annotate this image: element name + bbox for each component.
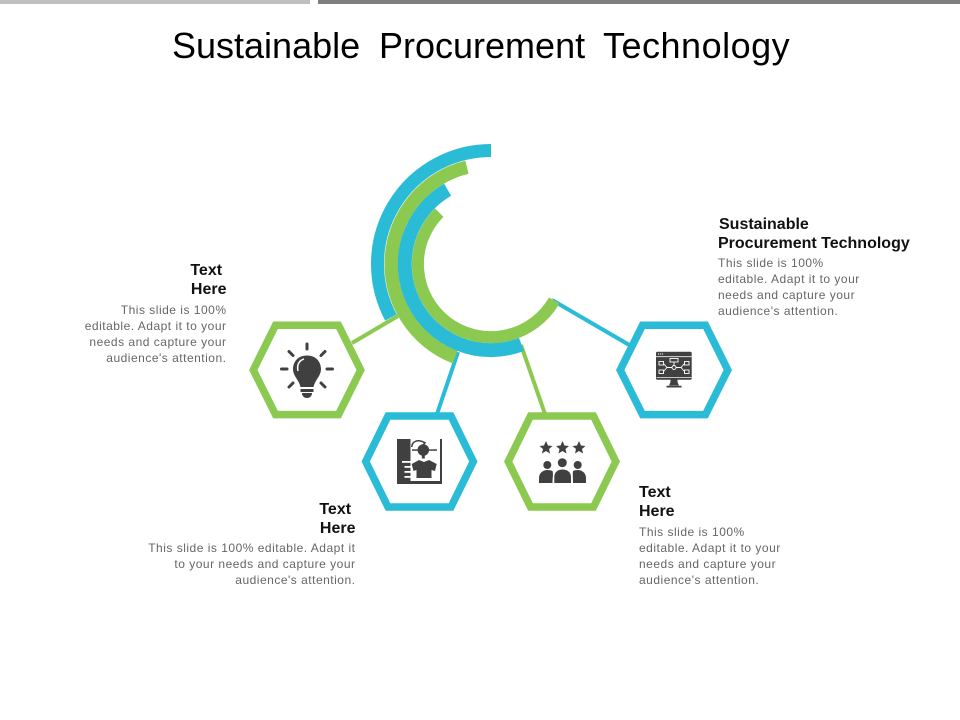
body: monitor: editable. Adapt it to your: [718, 272, 860, 286]
title: Sustainable: [172, 25, 360, 66]
body: people: editable. Adapt it to your: [639, 541, 781, 555]
heading: shirt: [319, 501, 356, 537]
text block: people: [639, 484, 781, 587]
heading: people: [639, 484, 675, 520]
arc: second green: [391, 167, 467, 357]
icon: light bulb: [282, 344, 332, 398]
concentric arcs: [377, 150, 554, 357]
body: shirt: This slide is 100% editable. Adapt it: [148, 541, 356, 555]
hexagon: bulb: [253, 325, 361, 415]
text block: monitor: [718, 216, 910, 318]
body: shirt: [148, 541, 356, 587]
heading: bulb: [190, 262, 226, 298]
body: bulb: needs and capture your: [89, 335, 226, 349]
body: people: audience's attention.: [639, 573, 759, 587]
heading: bulb: Text: [190, 262, 222, 279]
hexagon: people: [508, 416, 616, 507]
icon: people and stars: [539, 441, 586, 483]
body: bulb: editable. Adapt it to your: [85, 319, 226, 333]
heading: shirt: Text: [319, 501, 351, 518]
body: bulb: [85, 303, 226, 365]
title: Technology: [603, 25, 790, 66]
body: monitor: audience's attention.: [718, 304, 838, 318]
body: shirt: to your needs and capture your: [174, 557, 356, 571]
connector: people: [521, 345, 545, 414]
body: bulb: This slide is 100%: [121, 303, 226, 317]
hexagon: shirt: [366, 416, 473, 507]
heading: bulb: Here: [191, 281, 226, 298]
text block: shirt: [148, 501, 356, 587]
heading: shirt: Here: [320, 520, 356, 537]
body: people: needs and capture your: [639, 557, 776, 571]
body: shirt: audience's attention.: [235, 573, 356, 587]
title: Procurement: [379, 25, 585, 66]
body: monitor: needs and capture your: [718, 288, 855, 302]
body: monitor: [718, 256, 860, 318]
hexagon: monitor: [620, 325, 728, 415]
body: people: This slide is 100%: [639, 525, 745, 539]
icon: shirt 3D printer: [397, 439, 442, 484]
heading: people: Text: [639, 484, 671, 501]
connector: monitor: [552, 300, 631, 346]
arc: inner green: [418, 213, 554, 337]
body: people: [639, 525, 781, 587]
connector: bulb: [352, 316, 398, 343]
text block: bulb: [85, 262, 226, 365]
body: bulb: audience's attention.: [106, 351, 226, 365]
title: [172, 25, 790, 66]
heading: monitor: Procurement Technology: [718, 235, 910, 252]
arc: outer blue: [377, 150, 491, 318]
body: monitor: This slide is 100%: [718, 256, 824, 270]
heading: people: Here: [639, 503, 675, 520]
arc: third blue: [405, 190, 522, 350]
connector: shirt: [437, 352, 458, 414]
heading: monitor: Sustainable: [719, 216, 809, 233]
icon: monitor with flowchart: [656, 352, 692, 388]
heading: monitor: [718, 216, 910, 252]
